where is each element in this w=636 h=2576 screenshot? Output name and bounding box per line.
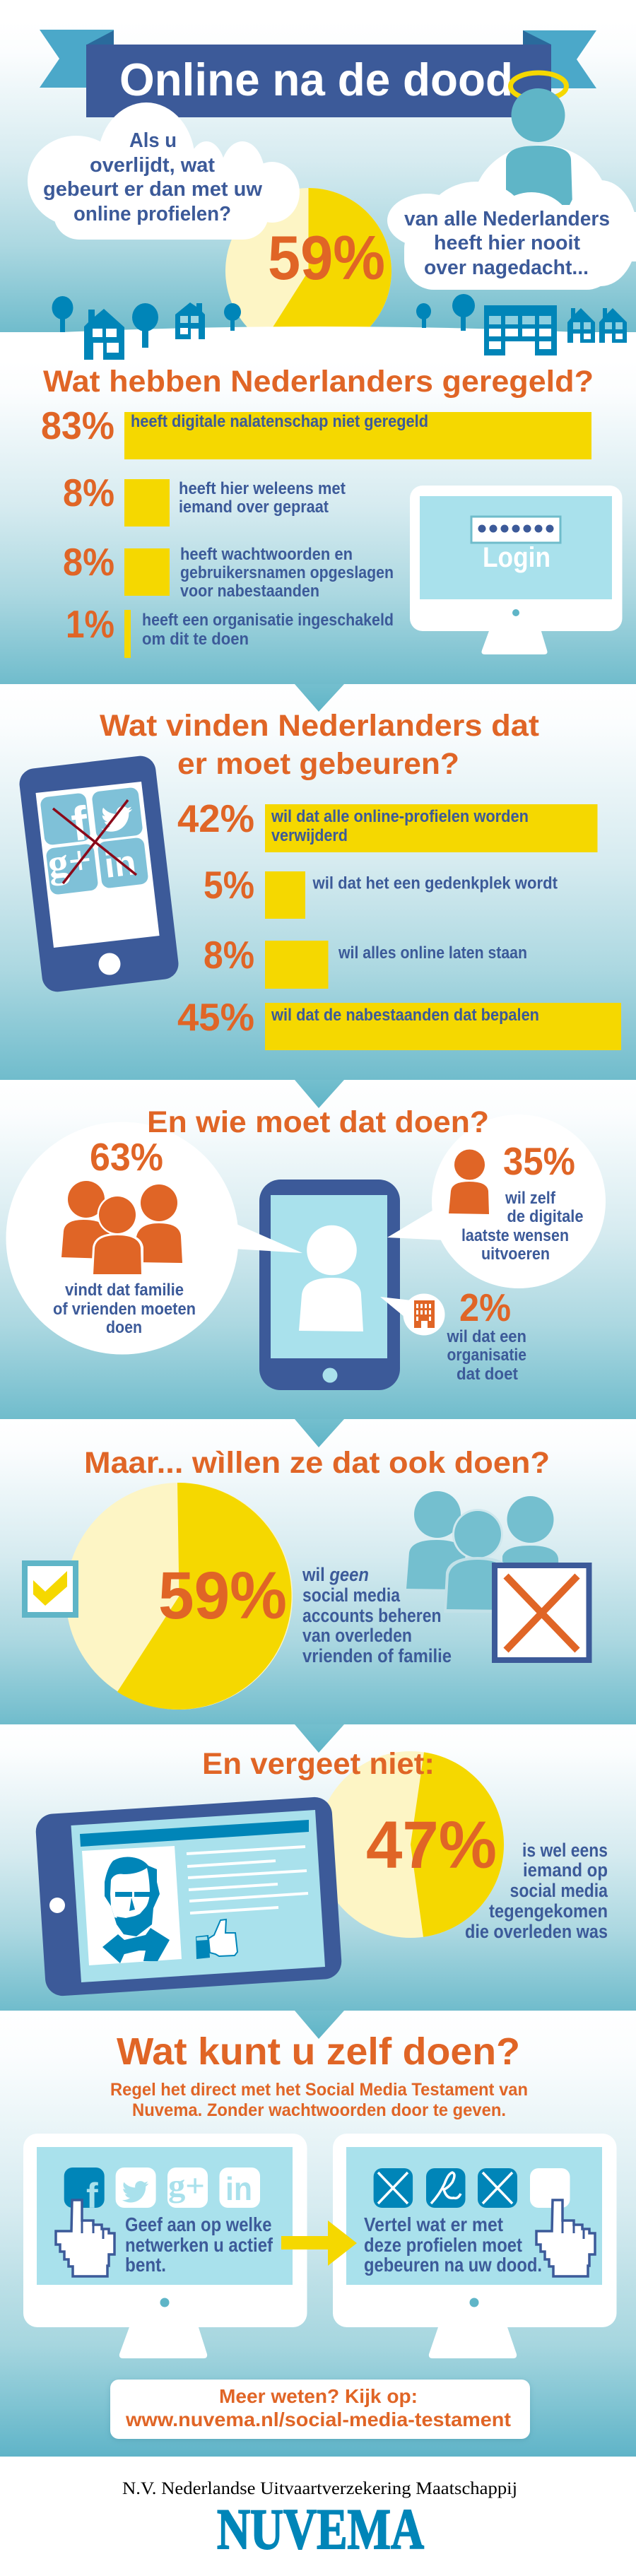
stat: 2 percent: organisatie bbox=[447, 1346, 526, 1365]
panel: header with title, clouds and village bbox=[0, 0, 636, 360]
speech bubble: 35 percent: de digitale bbox=[507, 1207, 584, 1226]
title ribbon: Online na de dood bbox=[119, 54, 513, 105]
stat: 2 percent: dat doet bbox=[457, 1365, 518, 1384]
bar row: 45 percent: wil dat de nabestaanden dat bepalen bbox=[271, 1006, 539, 1025]
bar row: 8 percent passwords: voor nabestaanden bbox=[180, 582, 319, 601]
bar row: 42 percent: verwijderd bbox=[271, 826, 348, 845]
icon: check box bbox=[25, 1563, 76, 1615]
subheading: Regel het direct met het Social Media Testament van bbox=[110, 2080, 528, 2100]
bar row: 83 percent: 83% bbox=[41, 404, 114, 447]
text: company name: N.V. Nederlandse Uitvaartverzekering Maatschappij bbox=[122, 2479, 517, 2498]
arrow: section pointer bbox=[295, 1724, 344, 1753]
bar row: 8 percent talked: heeft hier weleens met bbox=[179, 479, 346, 498]
speech bubble: 63 percent: vindt dat familie bbox=[65, 1281, 184, 1300]
icon: single person bbox=[449, 1149, 489, 1214]
panel: wat kunt u zelf doen bbox=[0, 2011, 636, 2457]
icon: halo bbox=[510, 73, 567, 100]
pie chart: 59 percent bbox=[66, 1483, 293, 1710]
bar row: 5 percent bbox=[204, 863, 558, 919]
heading bbox=[100, 709, 539, 781]
panel: wat hebben Nederlanders geregeld bbox=[0, 360, 636, 684]
icons: social networks bbox=[64, 2168, 260, 2216]
bar row: 83 percent: heeft digitale nalatenschap niet geregeld bbox=[131, 412, 428, 431]
text: step 1: bent. bbox=[125, 2254, 166, 2276]
icon: phone with crossed out social media: f bbox=[69, 796, 91, 852]
text: step 2: Vertel wat er met bbox=[364, 2213, 503, 2235]
bar row: 42 percent bbox=[177, 796, 598, 852]
arrow: section pointer bbox=[295, 1419, 344, 1447]
heading: er moet gebeuren? bbox=[177, 747, 459, 781]
text: cloud question: Als u bbox=[129, 129, 177, 152]
bar row: 8 percent: wil alles online laten staan bbox=[338, 943, 527, 963]
pie chart: 47 percent bbox=[317, 1751, 504, 1938]
text: 59 percent explanation: social media bbox=[302, 1584, 400, 1606]
bar row: 1 percent: om dit te doen bbox=[142, 630, 249, 649]
bar row: 8 percent passwords: 8% bbox=[63, 540, 114, 584]
icon: login monitor: Login bbox=[483, 542, 550, 573]
white hill bbox=[0, 327, 636, 360]
icon: phone with crossed out social media: g+ bbox=[45, 836, 94, 887]
monitor: step 2 bbox=[333, 2134, 616, 2358]
monitor: step 1 bbox=[23, 2134, 307, 2358]
bar row: 8 percent passwords bbox=[63, 540, 394, 601]
icon: angel person bbox=[506, 88, 572, 205]
cloud: left bbox=[28, 102, 300, 240]
heading: En wie moet dat doen? bbox=[147, 1105, 489, 1139]
text: 59 percent explanation: wil geen bbox=[302, 1564, 369, 1585]
bar row: 42 percent: wil dat alle online-profielen worden bbox=[271, 807, 529, 826]
speech bubble: 35 percent: laatste wensen bbox=[461, 1226, 569, 1245]
arrow: section pointer bbox=[295, 684, 344, 712]
speech bubble: 63 percent: of vrienden moeten bbox=[53, 1300, 196, 1319]
icon: pointer hand bbox=[536, 2200, 595, 2276]
arrow: section pointer bbox=[295, 1080, 344, 1108]
bar row: 42 percent: 42% bbox=[177, 796, 254, 840]
icon: pointer hand bbox=[56, 2200, 114, 2276]
icon: office building bbox=[414, 1300, 435, 1328]
text: 47 percent explanation: is wel eens bbox=[522, 1840, 608, 1861]
portrait: Lincoln bbox=[102, 1857, 170, 1963]
bar row: 5 percent: 5% bbox=[204, 863, 254, 907]
icons: social networks: f bbox=[86, 2176, 98, 2216]
icons: social networks: in bbox=[225, 2170, 252, 2207]
panel: en wie moet dat doen bbox=[0, 1080, 636, 1419]
speech bubble: 35 percent: 35% bbox=[503, 1139, 575, 1183]
bar row: 1 percent: 1% bbox=[66, 602, 114, 646]
speech bubble: 63 percent: 63% bbox=[90, 1135, 163, 1179]
text: step 1: netwerken u actief bbox=[125, 2234, 273, 2256]
icon: phone with crossed out social media: in bbox=[102, 842, 138, 886]
stat: 59 percent: 59% bbox=[158, 1558, 287, 1633]
text: 47 percent explanation: die overleden was bbox=[465, 1921, 608, 1942]
text: cloud answer: over nagedacht... bbox=[424, 257, 589, 279]
bar row: 8 percent passwords: gebruikersnamen opgeslagen bbox=[180, 563, 394, 582]
bar row: 8 percent bbox=[204, 933, 527, 989]
text: 47 percent explanation: tegengekomen bbox=[489, 1900, 608, 1922]
stat: 2 percent: 2% bbox=[459, 1286, 511, 1329]
icons: social networks: g+ bbox=[168, 2168, 205, 2204]
title ribbon bbox=[40, 30, 596, 117]
text: cloud question: online profielen? bbox=[73, 203, 231, 225]
footer bbox=[0, 2457, 636, 2576]
stat: 2 percent: wil dat een bbox=[447, 1327, 526, 1346]
cloud: right back lobe bbox=[473, 145, 608, 268]
text: 59 percent explanation bbox=[302, 1564, 452, 1666]
text: step 2 bbox=[364, 2213, 542, 2276]
icon: phone with person bbox=[259, 1180, 400, 1390]
speech bubble: 63 percent: doen bbox=[106, 1318, 142, 1337]
icon: thumbs up bbox=[196, 1919, 237, 1959]
text: cloud answer bbox=[404, 208, 610, 279]
text: cloud question: gebeurt er dan met uw bbox=[43, 178, 262, 201]
callout: meer weten: Meer weten? Kijk op: bbox=[219, 2385, 418, 2407]
logo: Nuvema: NUVEMA bbox=[217, 2497, 424, 2561]
heading: Maar... wìllen ze dat ook doen? bbox=[84, 1446, 550, 1480]
icon: login monitor bbox=[410, 486, 622, 654]
bar row: 5 percent: wil dat het een gedenkplek wordt bbox=[312, 874, 558, 893]
callout: meer weten: www.nuvema.nl/social-media-testament bbox=[125, 2409, 511, 2430]
bar row: 8 percent: 8% bbox=[204, 933, 254, 977]
bar row: 1 percent bbox=[66, 602, 394, 658]
text: 59 percent explanation: van overleden bbox=[302, 1625, 412, 1646]
text: step 1 bbox=[125, 2213, 273, 2276]
speech bubble: 35 percent bbox=[387, 1114, 606, 1288]
pie chart: 59 percent bbox=[225, 188, 391, 354]
icon: three people bbox=[61, 1181, 182, 1275]
text: 47 percent explanation bbox=[465, 1840, 608, 1942]
icon: cross box bbox=[495, 1565, 589, 1660]
text: 47 percent explanation: iemand op bbox=[523, 1859, 608, 1881]
speech bubble: 35 percent: wil zelf bbox=[505, 1189, 556, 1208]
text: step 2: deze profielen moet bbox=[364, 2234, 522, 2256]
bar row: 8 percent talked: iemand over gepraat bbox=[179, 498, 329, 517]
text: 47 percent explanation: social media bbox=[510, 1880, 608, 1901]
arrow: between steps bbox=[281, 2221, 357, 2266]
speech bubble: 35 percent: uitvoeren bbox=[481, 1245, 550, 1264]
stat: 59 percent: 59% bbox=[268, 223, 385, 293]
icon: phone with crossed out social media bbox=[18, 754, 180, 994]
subheading: Nuvema. Zonder wachtwoorden door te geven. bbox=[132, 2100, 506, 2120]
bar row: 83 percent bbox=[41, 404, 591, 459]
text: 59 percent explanation: accounts beheren bbox=[302, 1605, 441, 1626]
panel: en vergeet niet bbox=[0, 1724, 636, 2011]
bar row: 8 percent passwords: heeft wachtwoorden en bbox=[180, 545, 353, 564]
panel: wat vinden Nederlanders bbox=[0, 684, 636, 1080]
text: cloud question bbox=[43, 129, 262, 225]
text: cloud question: overlijdt, wat bbox=[90, 154, 215, 177]
text: step 2: gebeuren na uw dood. bbox=[364, 2254, 542, 2276]
text: step 1: Geef aan op welke bbox=[125, 2213, 271, 2235]
text: cloud answer: van alle Nederlanders bbox=[404, 208, 610, 230]
speech bubble: 2 percent bbox=[380, 1293, 445, 1336]
village: trees and houses bbox=[52, 294, 627, 360]
panel: maar willen ze dat ook doen bbox=[0, 1419, 636, 1724]
bar row: 45 percent bbox=[177, 995, 621, 1050]
heading: Wat hebben Nederlanders geregeld? bbox=[43, 365, 594, 399]
stat: 47 percent: 47% bbox=[366, 1808, 497, 1883]
icon: tablet with memorial profile bbox=[35, 1796, 343, 1997]
icons: profile choices bbox=[374, 2168, 570, 2208]
heading: Wat kunt u zelf doen? bbox=[117, 2030, 520, 2073]
heading: Wat vinden Nederlanders dat bbox=[100, 709, 539, 743]
bar row: 8 percent talked bbox=[63, 471, 346, 527]
text: 59 percent explanation: vrienden of familie bbox=[302, 1645, 452, 1666]
bar row: 8 percent talked: 8% bbox=[63, 471, 114, 514]
bar row: 1 percent: heeft een organisatie ingeschakeld bbox=[142, 611, 394, 630]
speech bubble: 63 percent bbox=[6, 1122, 302, 1354]
icon: three people with cross bbox=[406, 1491, 589, 1660]
text: cloud answer: heeft hier nooit bbox=[434, 232, 580, 254]
subheading bbox=[110, 2080, 528, 2120]
stat: 2 percent bbox=[447, 1286, 526, 1384]
bar row: 45 percent: 45% bbox=[177, 995, 254, 1039]
arrow: section pointer bbox=[295, 2011, 344, 2039]
callout: meer weten bbox=[110, 2380, 530, 2440]
heading: En vergeet niet: bbox=[202, 1747, 435, 1781]
cloud: right bbox=[387, 180, 636, 290]
